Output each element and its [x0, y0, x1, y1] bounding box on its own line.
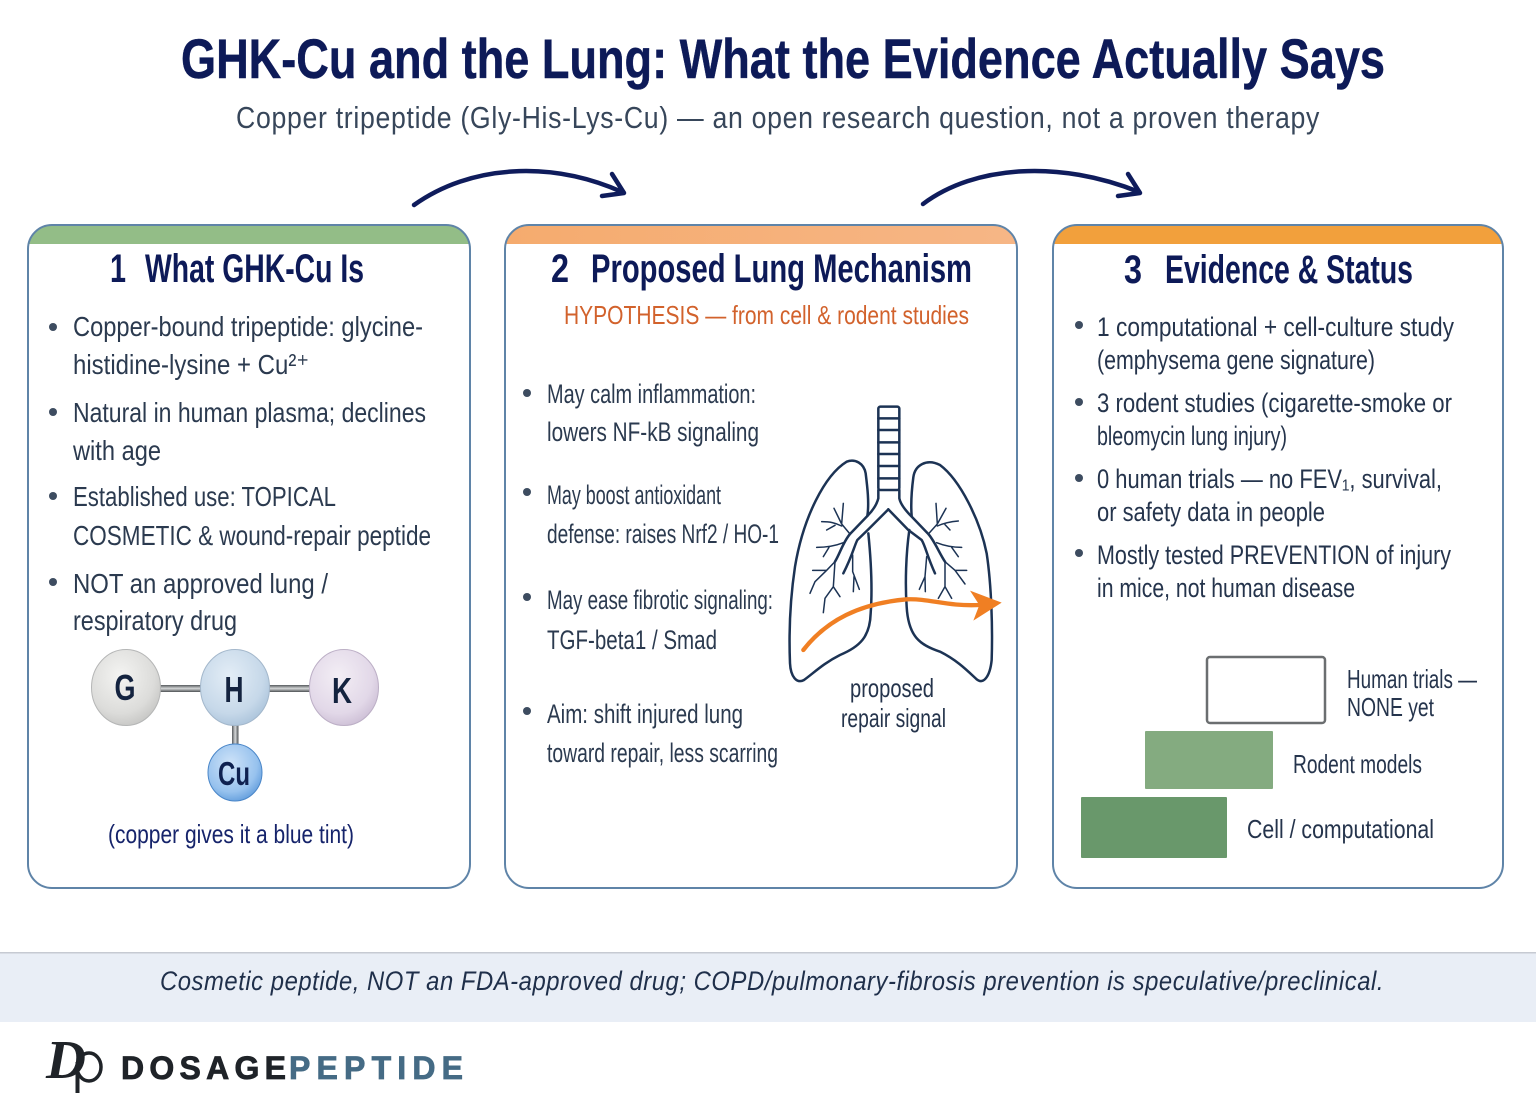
- panel 1 bullet list: Natural in human plasma; declines: [73, 397, 426, 428]
- panel 3 bullet list: (emphysema gene signature): [1097, 345, 1375, 375]
- tier: human trials: [1207, 657, 1477, 723]
- panel 2 heading: [551, 247, 972, 291]
- panel 3 bullet list: 3 rodent studies (cigarette-smoke or: [1097, 388, 1452, 418]
- molecule diagram: G-H-K with Cu: [92, 650, 378, 801]
- arrow: panel 2 to panel 3: [923, 171, 1140, 204]
- tier: human trials: NONE yet: [1347, 692, 1435, 722]
- panel 3 heading: [1124, 248, 1413, 292]
- panel 2 bullet list: defense: raises Nrf2 / HO-1: [547, 519, 779, 549]
- tier: rodent models: Rodent models: [1293, 749, 1422, 779]
- panel 1 bullet list: [49, 311, 431, 636]
- panel 2 bullet list: May boost antioxidant: [547, 480, 721, 510]
- footer disclaimer band: [0, 952, 1536, 1022]
- lungs caption: proposed: [850, 673, 934, 703]
- logo: DosagePeptide: [45, 1029, 463, 1093]
- lungs caption: [841, 673, 946, 733]
- footer disclaimer band: Cosmetic peptide, NOT an FDA-approved drug; COPD/pulmonary-fibrosis prevention is speculative/preclinical.: [160, 966, 1384, 996]
- panel 1 bullet list: COSMETIC & wound-repair peptide: [73, 520, 431, 551]
- panel 1 bullet list: Established use: TOPICAL: [73, 481, 336, 512]
- logo wordmark: [121, 1050, 463, 1086]
- panel: evidence and status: [1053, 225, 1503, 888]
- panel 2 heading: 2: [551, 247, 569, 291]
- panel 2 bullet list: May calm inflammation:: [547, 379, 756, 409]
- tier: rodent models: [1145, 731, 1422, 789]
- panel 1 bullet list: NOT an approved lung /: [73, 568, 328, 599]
- hypothesis subheading: HYPOTHESIS — from cell & rodent studies: [564, 300, 969, 330]
- panel 3 bullet list: Mostly tested PREVENTION of injury: [1097, 540, 1451, 570]
- panel: what GHK-Cu is: [28, 225, 470, 888]
- molecule diagram: G-H-K with Cu: K: [332, 670, 352, 711]
- logo mark: D: [45, 1029, 86, 1090]
- panel 1 bullet list: Copper-bound tripeptide: glycine-: [73, 311, 423, 342]
- panel 3 bullet list: 0 human trials — no FEV₁, survival,: [1097, 464, 1442, 494]
- panel 2 bullet list: [523, 379, 779, 768]
- icon: lungs with repair signal arrow: [790, 407, 1002, 681]
- subtitle: Copper tripeptide (Gly-His-Lys-Cu) — an open research question, not a proven therapy: [236, 100, 1320, 135]
- logo mark: [45, 1029, 101, 1093]
- panel 3 bullet list: [1075, 312, 1454, 603]
- panel 3 heading: Evidence & Status: [1165, 248, 1413, 292]
- panel 3 bullet list: in mice, not human disease: [1097, 573, 1355, 603]
- panel 1 heading: 1: [110, 247, 126, 291]
- panel 2 bullet list: toward repair, less scarring: [547, 738, 778, 768]
- panel 3 bullet list: bleomycin lung injury): [1097, 421, 1287, 451]
- logo wordmark: PEPTIDE: [289, 1050, 463, 1086]
- panel 1 heading: [110, 247, 364, 291]
- lungs caption: repair signal: [841, 703, 946, 733]
- panel 1 bullet list: with age: [72, 435, 161, 466]
- panel 2 heading: Proposed Lung Mechanism: [591, 247, 972, 291]
- panel 2 bullet list: May ease fibrotic signaling:: [547, 585, 773, 615]
- panel 2 bullet list: TGF-beta1 / Smad: [547, 625, 717, 655]
- panel: proposed lung mechanism: [505, 225, 1017, 888]
- panel 1 bullet list: respiratory drug: [73, 605, 237, 636]
- panel 3 heading: 3: [1124, 248, 1142, 292]
- molecule diagram: G-H-K with Cu: H: [224, 669, 244, 710]
- panel 2 bullet list: lowers NF-kB signaling: [547, 417, 759, 447]
- panel 1 bullet list: histidine-lysine + Cu²⁺: [73, 349, 309, 380]
- molecule diagram: G-H-K with Cu: G: [114, 667, 136, 708]
- arrow: panel 1 to panel 2: [414, 171, 624, 205]
- evidence pyramid: [1081, 657, 1477, 858]
- panel 3 bullet list: or safety data in people: [1097, 497, 1325, 527]
- panel 2 bullet list: Aim: shift injured lung: [547, 699, 743, 729]
- molecule caption: (copper gives it a blue tint): [108, 819, 354, 849]
- panel 3 bullet list: 1 computational + cell-culture study: [1097, 312, 1454, 342]
- tier: cell and computational: [1081, 797, 1434, 858]
- tier: human trials: Human trials —: [1347, 664, 1477, 694]
- molecule diagram: G-H-K with Cu: Cu: [218, 755, 250, 792]
- tier: cell and computational: Cell / computational: [1247, 814, 1434, 844]
- logo wordmark: DOSAGE: [121, 1050, 286, 1086]
- panel 1 heading: What GHK-Cu Is: [145, 247, 364, 291]
